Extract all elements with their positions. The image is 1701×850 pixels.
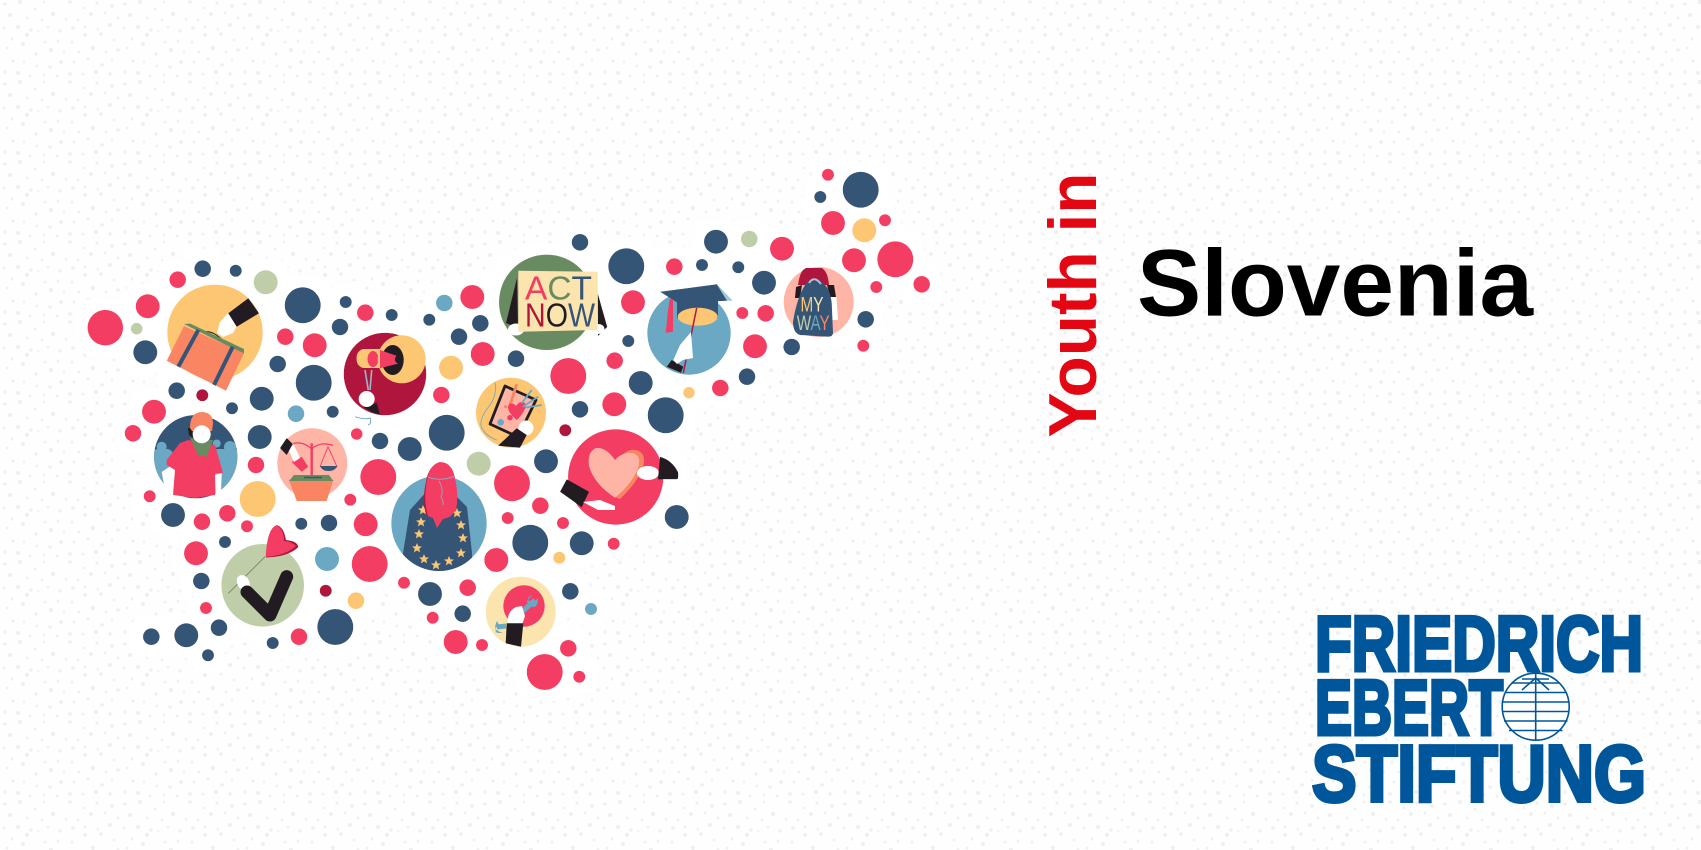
- icon: person wearing mask: [152, 412, 240, 499]
- title: Slovenia: Slovenia: [1137, 230, 1534, 336]
- icon: ACT NOW placard: [499, 255, 607, 350]
- EU stars: [412, 505, 468, 569]
- scattered dots: [88, 169, 930, 690]
- logo text line 3: STIFTUNG: [1312, 729, 1646, 818]
- logo text line 2: EBERT: [1315, 664, 1503, 752]
- icon: megaphone: [344, 333, 426, 425]
- icon: scales and ballot box: [277, 428, 347, 501]
- icon: graduation cap: [647, 284, 733, 375]
- icon: MY WAY backpack: [784, 267, 854, 337]
- icon: suitcase in hand: [167, 285, 263, 391]
- text: WAY: WAY: [797, 312, 830, 335]
- icon: phone with heart: [476, 378, 546, 448]
- icon: hand voting with heart: [221, 525, 304, 627]
- logo globe: [1502, 673, 1569, 740]
- icon: heart held by hands: [560, 429, 678, 525]
- icon: European woman with stars: [391, 462, 487, 580]
- icon: hand holding wrench: [486, 577, 556, 647]
- text: MY: MY: [800, 294, 824, 316]
- logo: Friedrich Ebert Stiftung: [1312, 600, 1646, 818]
- title: Youth in (rotated): Youth in: [1035, 172, 1111, 438]
- map of Slovenia made of circles: [88, 169, 930, 690]
- text: ACT: ACT: [525, 270, 592, 306]
- text: NOW: NOW: [525, 296, 596, 334]
